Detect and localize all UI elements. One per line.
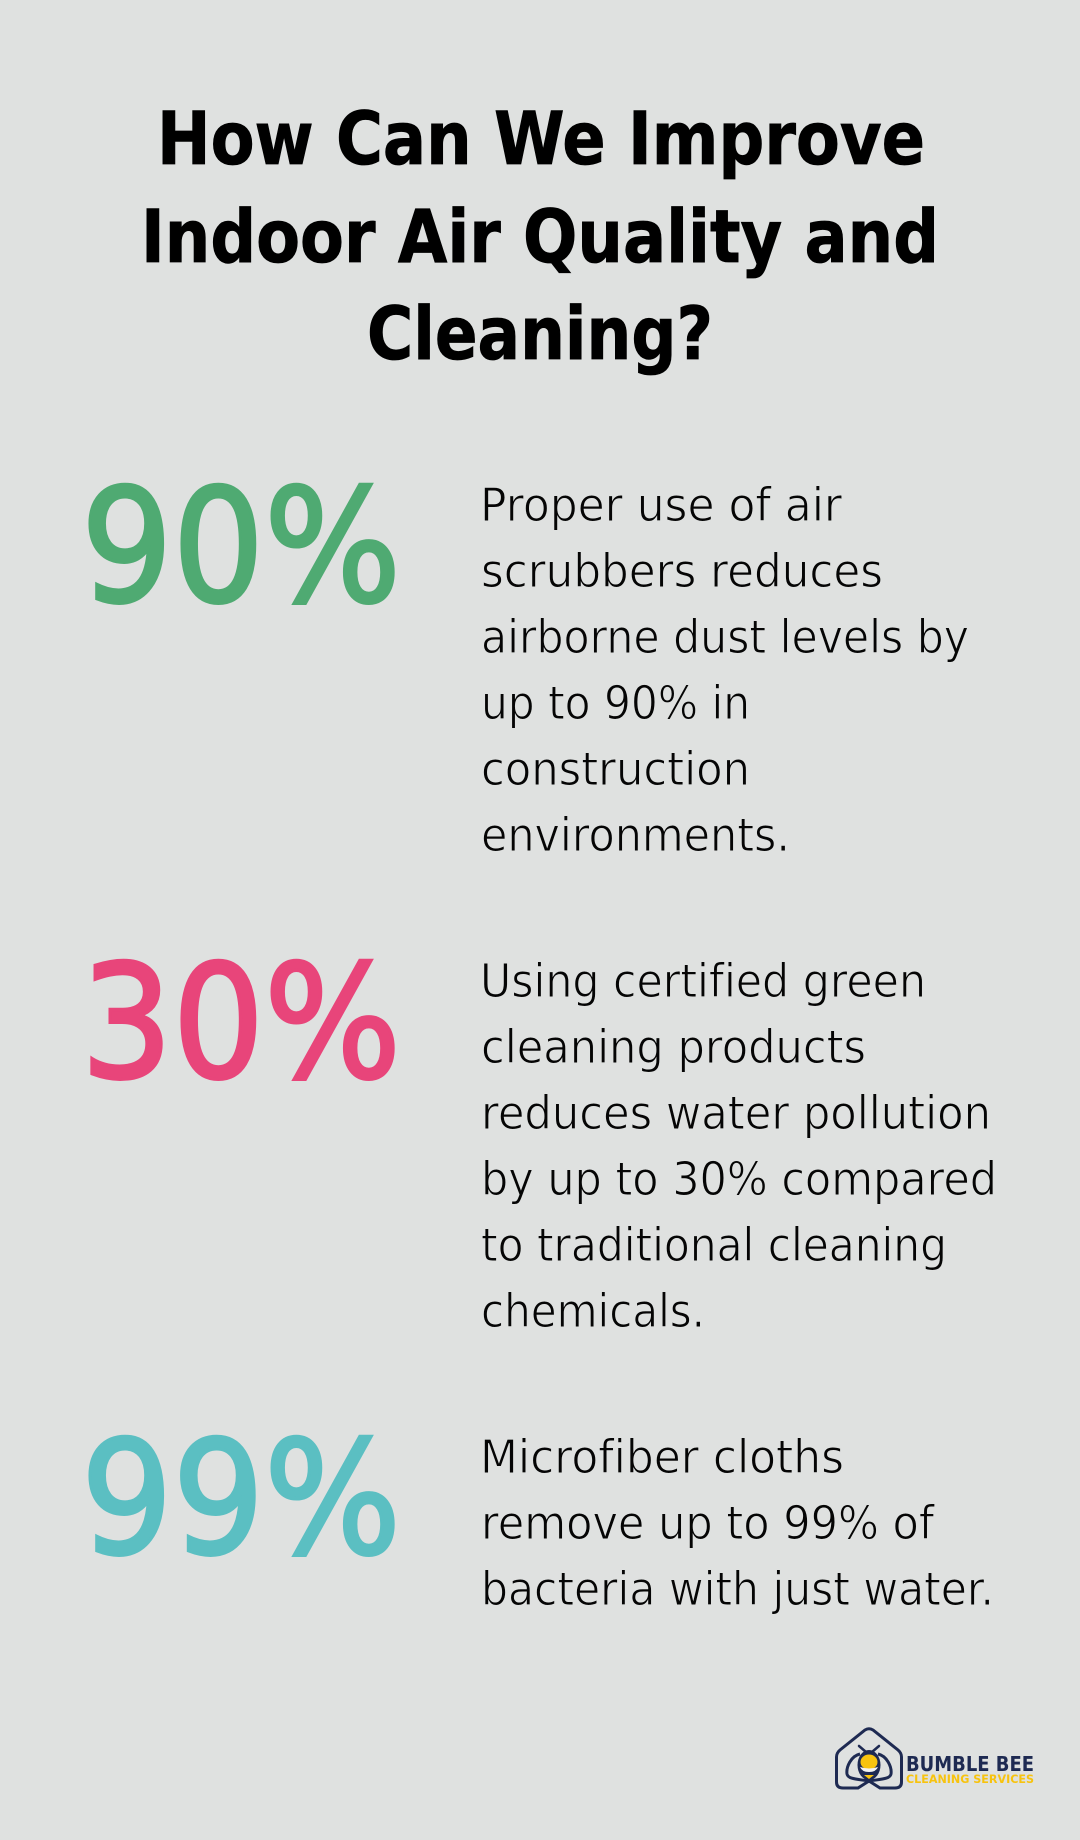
text block: air scrubbers: environments. [481,808,790,862]
text block: microfiber cloths: remove up to 99% of [481,1496,936,1550]
text block: microfiber cloths [480,1430,994,1616]
text block: green cleaning products: cleaning products [481,1020,866,1074]
text block: green cleaning products [480,954,997,1338]
text block: microfiber cloths: bacteria with just water. [481,1562,994,1616]
text block: air scrubbers: up to 90% in [481,676,750,730]
text block: green cleaning products: by up to 30% compared [481,1152,997,1206]
title: Indoor Air Quality and [141,195,939,280]
text block: green cleaning products: chemicals. [481,1284,705,1338]
big number: 30%: 30% [81,932,401,1115]
logo text: Cleaning Services: CLEANING SERVICES [906,1772,1034,1786]
text block: green cleaning products: Using certified green [480,954,926,1008]
title: Cleaning? [367,292,713,377]
text block: air scrubbers: airborne dust levels by [481,610,969,664]
text block: air scrubbers: Proper use of air [480,478,842,532]
text block: air scrubbers: scrubbers reduces [481,544,883,598]
logo text: Bumble Bee: BUMBLE BEE [906,1752,1034,1776]
panel: 99% stat [81,1408,994,1616]
text block: green cleaning products: reduces water pollution [481,1086,991,1140]
panel: 30% stat [81,932,997,1338]
text block: air scrubbers [480,478,969,862]
big number: 90%: 90% [81,456,401,639]
icon: house with bee [836,1729,902,1788]
text block: green cleaning products: to traditional cleaning [481,1218,947,1272]
text block: air scrubbers: construction [481,742,750,796]
text block: microfiber cloths: Microfiber cloths [480,1430,844,1484]
title: How Can We Improve [157,97,925,182]
panel: 90% stat [81,456,969,862]
title [141,97,939,377]
big number: 99%: 99% [81,1408,401,1591]
logo: Bumble Bee Cleaning Services [836,1729,1034,1788]
